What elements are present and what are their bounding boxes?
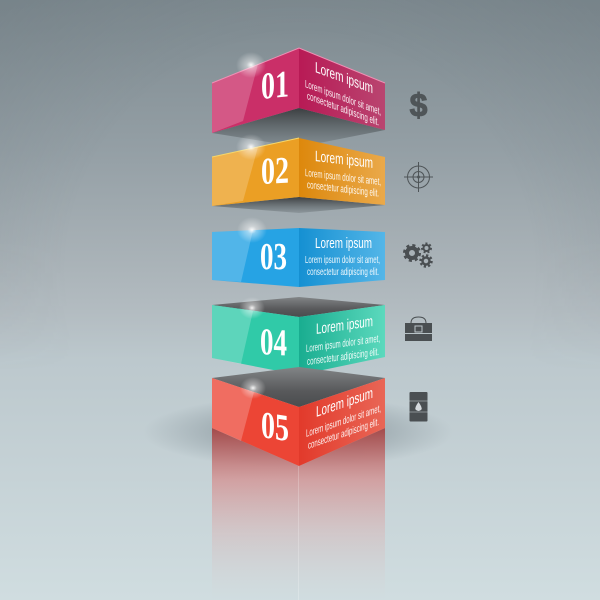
- number 05: 05: [261, 404, 289, 450]
- text block 03: Lorem ipsum dolor sit amet,: [305, 254, 380, 266]
- top face 04: [212, 297, 385, 317]
- icon: oil barrel: [410, 392, 428, 422]
- icon: target: [404, 162, 433, 192]
- text block 01: Lorem ipsum dolor sit amet,: [305, 78, 381, 118]
- text block 01: [305, 59, 381, 129]
- block 03: [212, 217, 385, 287]
- text block 05: consectetur adipiscing elit.: [308, 416, 379, 452]
- shadow under block 01: [212, 108, 385, 147]
- text block 05: Lorem ipsum dolor sit amet,: [306, 403, 381, 440]
- text block 02: consectetur adipiscing elit.: [307, 179, 379, 200]
- block 02: [212, 134, 385, 213]
- text block 05: [306, 385, 381, 452]
- text block 04: [306, 313, 380, 368]
- text block 04: Lorem ipsum: [316, 313, 373, 338]
- floor shadow: [143, 396, 453, 468]
- icon: dollar: $: [410, 87, 428, 123]
- text block 02: Lorem ipsum dolor sit amet,: [305, 167, 381, 188]
- text block 02: [305, 148, 381, 200]
- number 02: 02: [261, 150, 289, 193]
- shadow under block 02: [212, 197, 385, 213]
- block 04: [212, 297, 385, 375]
- icon: briefcase: [405, 317, 432, 341]
- block 01: [212, 48, 385, 147]
- text block 04: Lorem ipsum dolor sit amet,: [306, 333, 380, 355]
- text block 01: consectetur adipiscing elit.: [307, 90, 379, 129]
- block 05: [212, 367, 385, 466]
- text block 01: Lorem ipsum: [315, 59, 373, 97]
- number 04: 04: [260, 321, 287, 365]
- number 03: 03: [260, 236, 287, 278]
- text block 03: consectetur adipiscing elit.: [307, 266, 379, 278]
- reflection of block 05: [212, 428, 385, 600]
- text block 02: Lorem ipsum: [315, 148, 373, 172]
- text block 03: [305, 235, 380, 278]
- icon: gears: [404, 244, 432, 266]
- text block 03: Lorem ipsum: [315, 235, 372, 252]
- number 01: 01: [261, 63, 289, 108]
- text block 04: consectetur adipiscing elit.: [307, 346, 379, 368]
- text block 05: Lorem ipsum: [316, 385, 373, 421]
- top face 05: [212, 367, 385, 407]
